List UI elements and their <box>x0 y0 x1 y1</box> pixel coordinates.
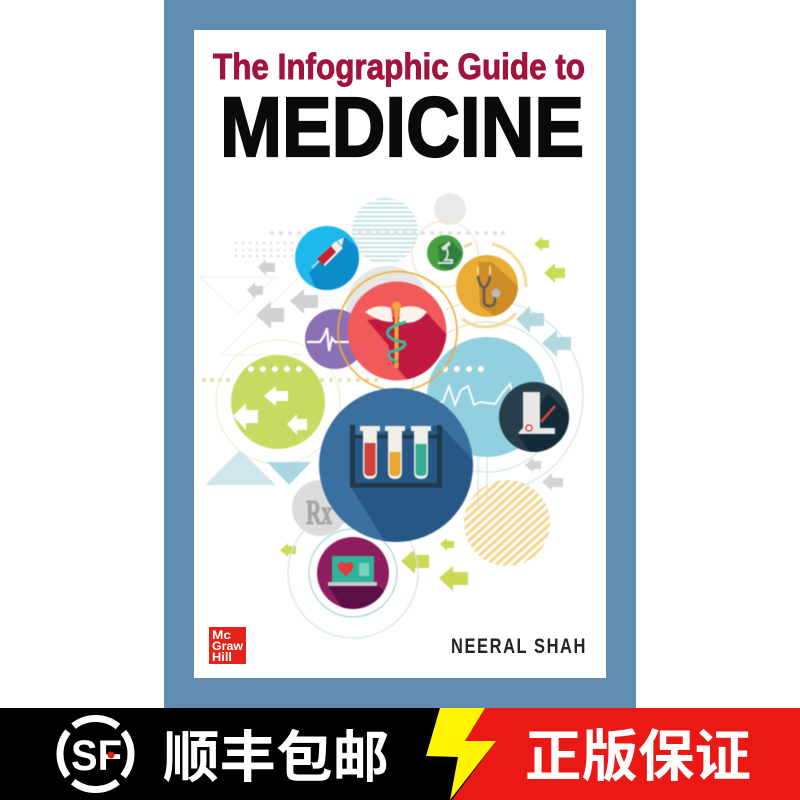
light triangle <box>205 450 276 485</box>
rack <box>350 425 442 488</box>
cover white panel <box>194 30 606 678</box>
banner black section <box>0 708 800 800</box>
striped teal circle <box>352 198 418 264</box>
orange ring <box>338 272 457 390</box>
icon: Rx: Rx <box>306 493 332 532</box>
outline triangles <box>200 276 345 355</box>
lime circle with arrows <box>231 355 325 449</box>
teal arrows <box>516 306 571 357</box>
grey circle behind caduceus <box>346 266 430 350</box>
lime arrows, upper right <box>534 237 565 283</box>
thin rings around light blue circle <box>412 300 583 510</box>
white dots <box>248 366 302 372</box>
icon: microscope ring <box>412 221 478 287</box>
stethoscope arcs <box>462 243 526 327</box>
icon: SF logo <box>60 718 131 790</box>
icon: syringe <box>294 225 360 291</box>
promo banner <box>0 708 800 800</box>
light blue ECG circle <box>427 337 547 457</box>
medium triangle <box>267 462 311 485</box>
yellow tube <box>385 426 405 479</box>
book cover background <box>164 0 636 708</box>
illustration <box>200 193 583 638</box>
logo: McGraw Hill: Graw <box>212 639 244 653</box>
grey arrows, upper left <box>247 259 318 329</box>
orange striped circle <box>464 480 550 566</box>
icon: Rx <box>292 480 348 536</box>
logo: McGraw Hill: Hill <box>212 650 232 664</box>
laptop rings <box>288 508 418 638</box>
olive dot row <box>202 378 378 382</box>
title: MEDICINE: MEDICINE <box>220 80 584 174</box>
text: genuine guarantee: 正版保证 <box>525 725 751 788</box>
banner red section <box>452 708 800 800</box>
icon: prescription document <box>498 381 570 453</box>
red tube <box>360 426 380 479</box>
icon: microscope <box>427 235 463 271</box>
white dots <box>442 366 484 372</box>
icon: laptop <box>317 537 395 612</box>
icon: test tubes <box>319 388 473 560</box>
grey arrows, lower right <box>525 458 563 491</box>
logo: McGraw Hill: Mc <box>212 628 231 642</box>
lime circle ring <box>216 340 340 464</box>
icon: caduceus <box>347 280 448 382</box>
text: free shipping: 顺丰包邮 <box>163 726 389 789</box>
lime arrows, lower <box>280 538 468 591</box>
author name: NEERAL SHAH <box>451 635 587 658</box>
icon: lightning bolt <box>426 708 496 800</box>
grey circle <box>434 193 466 225</box>
icon: stethoscope <box>456 255 522 320</box>
icon: purple ECG circle <box>305 309 365 369</box>
logo: McGraw Hill <box>209 627 246 664</box>
title line: The Infographic Guide to <box>213 46 585 87</box>
green tube <box>411 426 431 479</box>
ECG line <box>432 384 530 405</box>
icon: SF logo: SF <box>71 732 122 780</box>
dot grid <box>235 231 505 257</box>
white arrows <box>233 386 307 435</box>
